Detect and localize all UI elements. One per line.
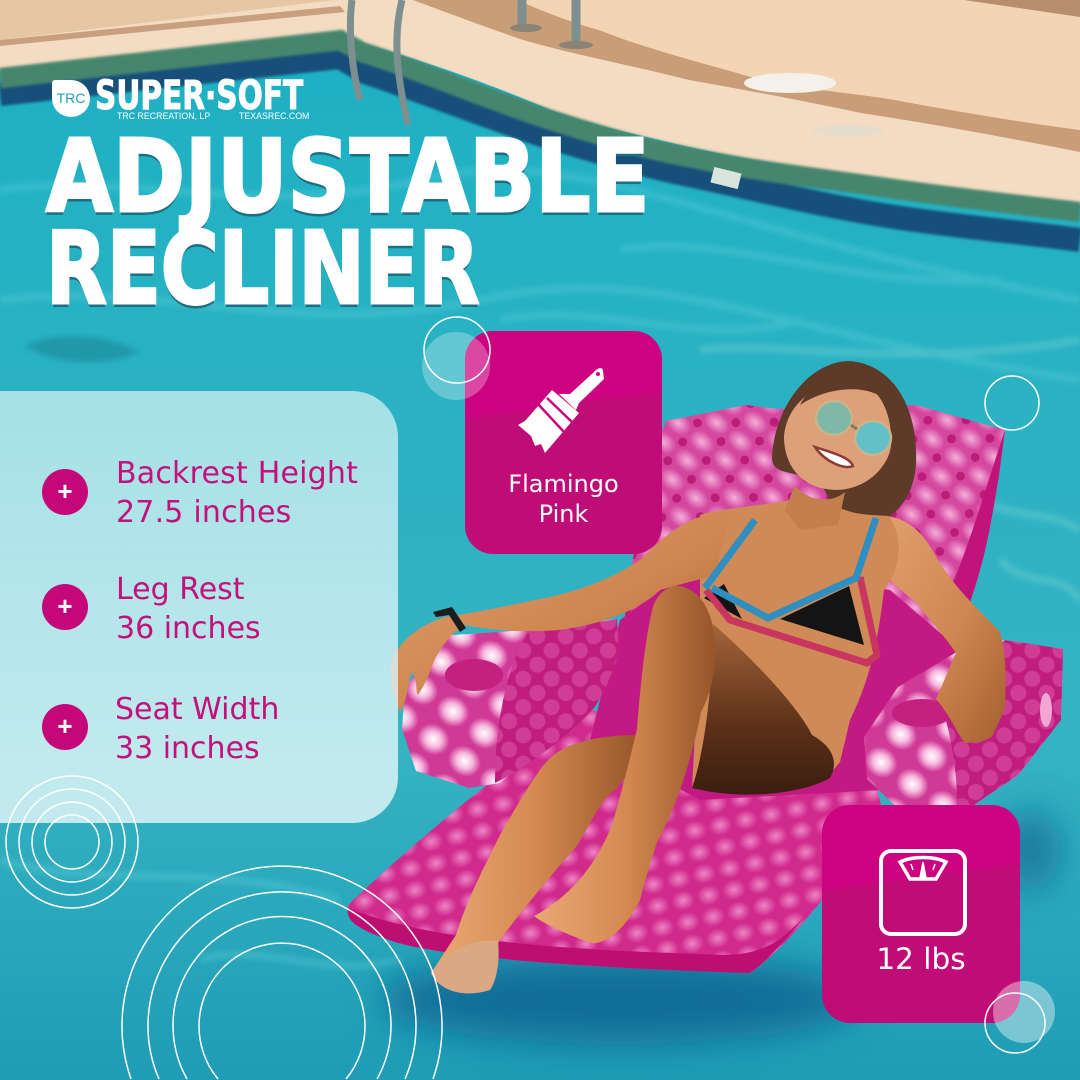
seat backing [590, 560, 960, 800]
title [44, 118, 650, 327]
spec: backrest height: 27.5 inches [116, 495, 291, 530]
title: RECLINER [46, 210, 479, 327]
bikini top [704, 518, 877, 663]
hair [772, 361, 916, 529]
spec: leg rest: 36 inches [116, 611, 261, 646]
drain cover [744, 73, 836, 93]
spec: backrest height [42, 456, 358, 530]
logo badge: TRC [57, 90, 85, 106]
logo subline: TEXASREC.COM [239, 111, 309, 121]
raised leg [534, 586, 716, 943]
plus icon [42, 584, 88, 630]
title: ADJUSTABLE [46, 118, 650, 235]
woman [391, 361, 1006, 993]
right armrest [864, 640, 1063, 817]
plus icon [42, 469, 88, 515]
spec: seat width: Seat Width [115, 692, 279, 727]
plus icon: + [57, 476, 73, 506]
spec: leg rest [42, 572, 261, 646]
logo subline: TRC RECREATION, LP [117, 111, 210, 121]
left arm [391, 512, 730, 712]
brand logo [52, 73, 309, 121]
plus icon: + [57, 591, 73, 621]
neck shadow [785, 485, 845, 530]
icon: weighing scale [879, 849, 967, 936]
hair fringe [800, 378, 885, 405]
weight label: 12 lbs [876, 942, 966, 976]
sunglasses [816, 401, 891, 455]
colour label: Pink [539, 500, 588, 528]
logo badge [52, 80, 90, 117]
plus icon: + [57, 711, 73, 741]
face [784, 382, 891, 490]
water shadow under float [380, 810, 1060, 1044]
spec: seat width: 33 inches [115, 731, 260, 766]
colour label: Flamingo [508, 470, 619, 498]
foot [431, 941, 499, 993]
backrest [620, 405, 1005, 690]
panel: dimensions [0, 391, 398, 823]
pool ladder rails [350, 0, 576, 125]
colour label [508, 470, 619, 528]
plus icon [42, 704, 88, 750]
left armrest [402, 619, 619, 788]
torso [692, 500, 899, 794]
spec: leg rest: Leg Rest [116, 572, 245, 607]
seat and leg section [348, 710, 884, 973]
panel: weight callout [822, 805, 1020, 1023]
pool coping and tile [0, 40, 1080, 240]
pink float [348, 405, 1063, 973]
pool deck [0, 0, 1080, 205]
logo wordmark: SUPER·SOFT [95, 73, 303, 119]
right arm [884, 516, 1006, 743]
icon: paint brush [518, 368, 604, 453]
spec: seat width [42, 692, 279, 766]
watch [433, 607, 466, 632]
panel: colour callout [465, 331, 662, 554]
logo subline [117, 111, 309, 121]
spec: backrest height: Backrest Height [116, 456, 358, 491]
water ripples [0, 170, 1080, 966]
lower leg [431, 735, 640, 991]
underside of thigh [692, 624, 834, 795]
smile [815, 447, 853, 467]
